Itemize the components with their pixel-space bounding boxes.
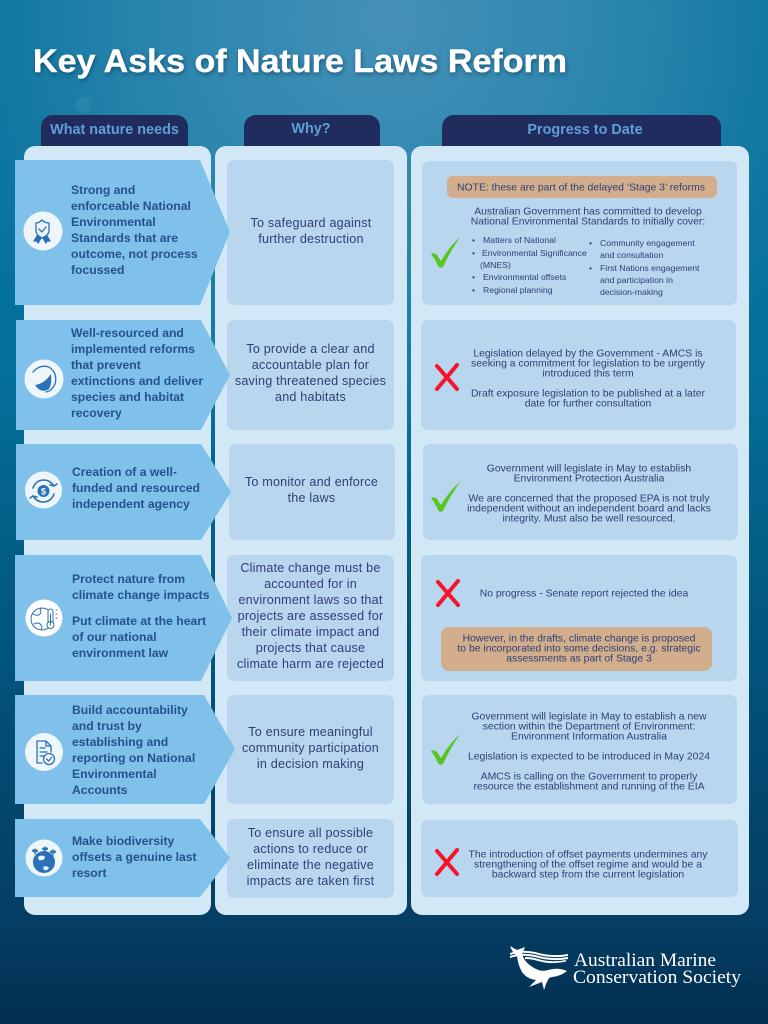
standards list left [472, 235, 587, 295]
row 1: why card: To safeguard against [251, 216, 372, 230]
row 6: progress card [421, 820, 738, 897]
row 3: progress card: integrity. Must also be well resourced. [502, 514, 676, 524]
row 6: progress card: backward step from the current legislation [492, 870, 684, 880]
row 6: why card: eliminate the negative [247, 858, 374, 872]
standards list right: decision-making [600, 287, 663, 297]
row 2: need arrow: recovery [71, 406, 122, 420]
row 5: need arrow: establishing and [72, 735, 168, 749]
row 3: progress card: independent without an independent board and lacks [467, 504, 711, 514]
row 4: why card: accounted for in [264, 577, 357, 591]
row 2: progress card: date for further consultation [525, 398, 651, 410]
standards list right: and participation in [600, 275, 673, 285]
row 1: progress card: Australian Government has committed to develop [474, 206, 702, 218]
row 6: need arrow: offsets a genuine last [72, 850, 197, 864]
row 5: need arrow: and trust by [72, 719, 142, 733]
row 4: need arrow: climate change impacts [72, 588, 210, 602]
row 3: need arrow: Creation of a well- [72, 465, 177, 479]
row 1: why card: further destruction [258, 232, 364, 246]
standards list left: Matters of National [483, 235, 556, 245]
row 5: need arrow: reporting on National [72, 751, 195, 765]
row 1: need arrow: enforceable National [71, 199, 191, 213]
row 6: why card: impacts are taken first [247, 874, 375, 888]
column header: why [244, 115, 380, 146]
row 2: progress card: Legislation delayed by the Government - AMCS is [473, 348, 703, 360]
row 6: why card [227, 819, 394, 898]
row 3: progress card: We are concerned that the proposed EPA is not truly [468, 494, 710, 504]
icon: green tick [431, 237, 460, 268]
icon: money cycle: $ [41, 486, 46, 496]
note pill [447, 176, 717, 198]
row 3: why card [229, 444, 395, 540]
standards list left: Regional planning [483, 285, 553, 295]
row 6: need arrow: resort [72, 866, 107, 880]
row 3: why card: To monitor and enforce [245, 475, 378, 489]
row 3: progress card [423, 444, 738, 540]
row 2: need arrow: species and habitat [71, 390, 184, 404]
standards list right: • [589, 263, 592, 273]
row 6: why card: To ensure all possible [248, 826, 373, 840]
standards list right: First Nations engagement [600, 263, 700, 273]
row 6: progress card: The introduction of offset payments undermines any [469, 850, 708, 860]
row 1: progress card [422, 161, 737, 305]
row 6: need arrow: Make biodiversity [72, 834, 175, 848]
panel: why column [215, 146, 407, 915]
note pill: to be incorporated into some decisions, e.g. strategic [457, 644, 701, 654]
row 5: need arrow: Build accountability [72, 703, 188, 717]
row 4: why card: projects are assessed for [238, 609, 383, 623]
row 4: why card: Climate change must be [240, 561, 381, 575]
row 4: need arrow: of our national [72, 630, 157, 644]
row 2: need arrow: extinctions and deliver [71, 374, 203, 388]
standards list left: • [472, 285, 475, 295]
row 4: why card [227, 555, 394, 681]
logo: Australian Marine Conservation Society [510, 946, 742, 990]
row 4: need arrow: environment law [72, 646, 169, 660]
row 3: progress card: Environment Protection Australia [514, 474, 665, 484]
icon: red cross [437, 365, 457, 389]
row 2: need arrow [16, 320, 230, 430]
row 1: need arrow: Strong and [71, 183, 135, 197]
row 5: why card: To ensure meaningful [248, 725, 373, 739]
column header: progress to date: Progress to Date [527, 122, 643, 138]
row 2: progress card [421, 320, 736, 430]
standards list right [589, 238, 700, 297]
row 1: need arrow: Standards that are [71, 231, 178, 245]
row 2: why card: saving threatened species [235, 374, 386, 388]
row 5: progress card: Environment Information Australia [511, 732, 667, 742]
row 6: why card: actions to reduce or [253, 842, 368, 856]
row 5: progress card: section within the Department of Environment: [483, 722, 695, 732]
row 5: progress card: Legislation is expected to be introduced in May 2024 [468, 752, 710, 762]
row 2: why card: accountable plan for [252, 358, 369, 372]
column header: progress to date [442, 115, 721, 146]
icon: red cross [437, 850, 457, 874]
row 5: need arrow [15, 695, 235, 804]
standards list left: • [472, 248, 475, 258]
row 2: need arrow: Well-resourced and [71, 326, 184, 340]
logo: Australian Marine Conservation Society: Conservation Society [573, 968, 742, 988]
standards list left: Environmental Significance [482, 248, 587, 258]
icon: fin and wave [33, 366, 56, 392]
row 4: need arrow: Protect nature from [72, 572, 185, 586]
icon: globe and thermometer [31, 608, 57, 630]
row 1: need arrow: focussed [71, 263, 125, 277]
standards list right: and consultation [600, 250, 663, 260]
panel: progress column [411, 146, 749, 915]
row 5: why card [227, 695, 394, 804]
standards list left: Environmental offsets [483, 272, 567, 282]
row 5: progress card: Government will legislate in May to establish a new [471, 712, 707, 722]
row 6: progress card: strengthening of the offset regime and would be a [474, 860, 702, 870]
standards list left: (MNES) [480, 260, 511, 270]
row 1: need arrow [15, 160, 230, 305]
title: Key Asks of Nature Laws Reform [33, 43, 567, 79]
note pill: assessments as part of Stage 3 [506, 654, 652, 664]
row 3: why card: the laws [288, 491, 335, 505]
row 1: progress card: National Environmental Standards to initially cover: [471, 216, 705, 228]
row 2: why card: and habitats [275, 390, 346, 404]
row 2: progress card: seeking a commitment for legislation to be urgently [471, 358, 706, 370]
row 5: need arrow: Accounts [72, 783, 128, 797]
row 5: progress card: AMCS is calling on the Government to properly [481, 772, 698, 782]
row 1: need arrow: outcome, not process [71, 247, 198, 261]
column header: what nature needs: What nature needs [50, 122, 179, 138]
standards list left: • [472, 235, 475, 245]
note pill [441, 627, 712, 671]
row 4: why card: their climate impact and [242, 625, 379, 639]
row 2: progress card: Draft exposure legislation to be published at a later [471, 388, 706, 400]
row 2: need arrow: that prevent [71, 358, 141, 372]
icon: red cross [438, 581, 458, 605]
row 2: why card: To provide a clear and [246, 342, 375, 356]
row 4: progress card [421, 555, 737, 681]
row 2: need arrow: implemented reforms [71, 342, 195, 356]
standards list right: Community engagement [600, 238, 695, 248]
row 6: need arrow [15, 819, 230, 897]
row 4: need arrow: Put climate at the heart [72, 614, 206, 628]
logo: Australian Marine Conservation Society: Australian Marine [574, 951, 716, 971]
icon: money cycle [30, 480, 57, 502]
row 4: progress card: No progress - Senate report rejected the idea [480, 588, 688, 600]
row 5: why card: in decision making [257, 757, 364, 771]
row 2: why card [227, 320, 394, 430]
standards list right: • [589, 238, 592, 248]
row 4: why card: projects that cause [256, 641, 365, 655]
icon: document with check [37, 741, 54, 764]
row 5: why card: community participation [242, 741, 379, 755]
row 4: why card: environment laws so that [238, 593, 383, 607]
icon: green tick [431, 481, 461, 512]
note pill: NOTE: these are part of the delayed ‘Stage 3’ reforms [457, 182, 705, 194]
icon: shield with ribbon [34, 220, 50, 243]
note pill: However, in the drafts, climate change is proposed [463, 634, 696, 644]
row 3: need arrow: independent agency [72, 497, 190, 511]
row 2: progress card: introduced this term [542, 368, 634, 380]
column header: what nature needs [41, 115, 188, 146]
row 1: need arrow: Environmental [71, 215, 156, 229]
icon: globe with seedlings [32, 847, 56, 873]
column header: why: Why? [291, 121, 331, 137]
row 5: progress card: resource the establishment and running of the EIA [473, 782, 705, 792]
row 4: why card: climate harm are rejected [237, 657, 384, 671]
row 5: need arrow: Environmental [72, 767, 157, 781]
row 5: progress card [422, 695, 737, 804]
row 3: progress card: Government will legislate in May to establish [487, 464, 691, 474]
row 1: why card [227, 160, 394, 305]
row 3: need arrow: funded and resourced [72, 481, 200, 495]
icon: green tick [431, 734, 460, 765]
row 3: need arrow [16, 444, 231, 540]
panel: what nature needs column [24, 146, 211, 915]
standards list left: • [472, 272, 475, 282]
icon: whale [510, 946, 568, 990]
row 4: need arrow [15, 555, 232, 681]
